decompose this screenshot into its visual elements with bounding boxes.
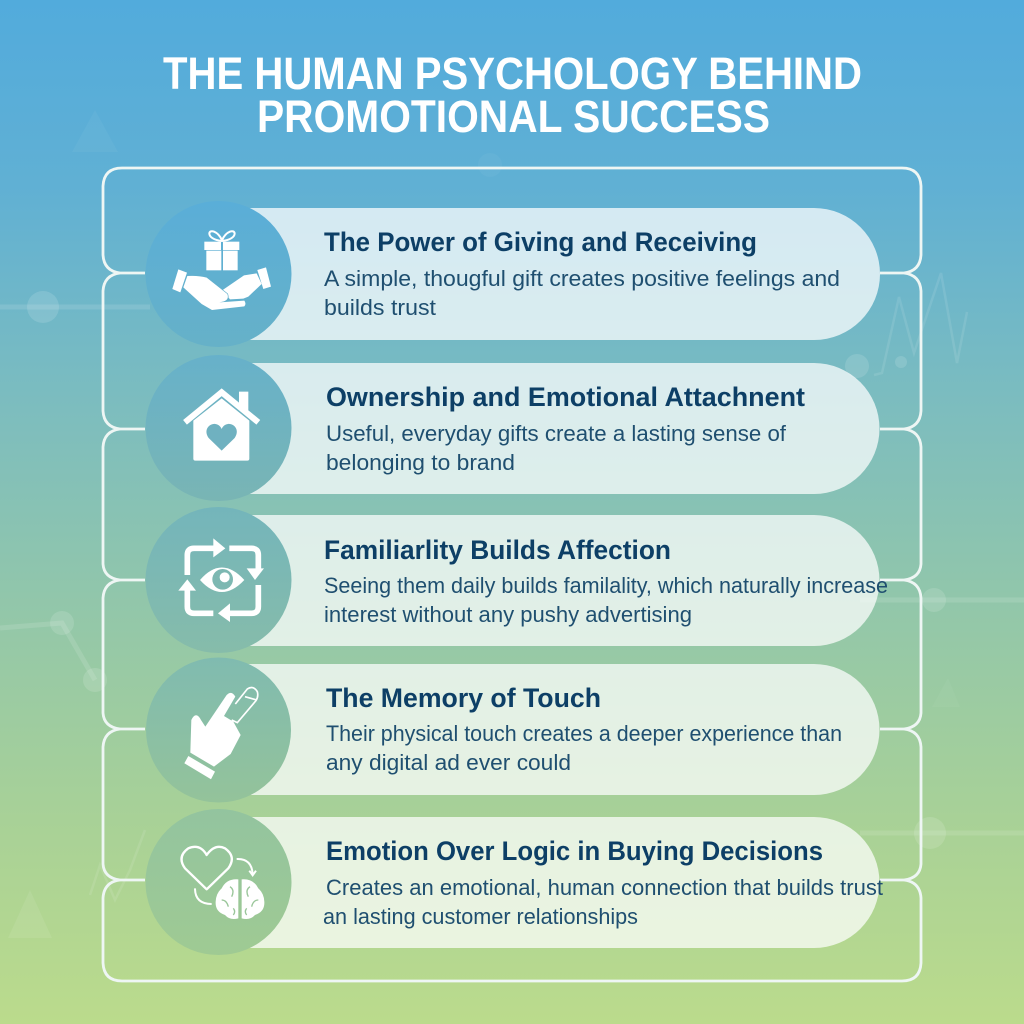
icon: hand touching pen (184, 687, 258, 779)
text block: interest without any pushy advertising (324, 602, 692, 627)
text block: belonging to brand (326, 450, 515, 475)
text block: A simple, thougful gift creates positive feelings and (324, 266, 840, 291)
text block: Emotion Over Logic in Buying Decisions (326, 836, 823, 866)
text block: Creates an emotional, human connection that builds trust (326, 875, 883, 900)
icon: eye with cycle arrows (178, 538, 264, 622)
title (163, 48, 862, 142)
text block: Useful, everyday gifts create a lasting sense of (326, 421, 787, 446)
text block (323, 836, 883, 929)
connected frame outline (103, 168, 921, 981)
text block (324, 227, 840, 320)
pill background (240, 515, 880, 646)
text block: Their physical touch creates a deeper experience than (326, 721, 842, 746)
icon circle (146, 355, 292, 501)
panel: ownership and emotional attachment (146, 355, 880, 501)
title: THE HUMAN PSYCHOLOGY BEHIND (163, 48, 862, 99)
icon circle (146, 201, 292, 347)
text block: Ownership and Emotional Attachnent (326, 382, 805, 412)
panel: emotion over logic (146, 809, 883, 955)
panel: the memory of touch (146, 658, 880, 802)
icon: gift in hands (172, 231, 271, 310)
icon: heart and brain (182, 847, 264, 919)
text block: any digital ad ever could (326, 750, 571, 775)
icon circle (146, 809, 292, 955)
pill background (240, 664, 880, 795)
pill background (240, 208, 880, 340)
icon circle (146, 507, 292, 653)
text block: an lasting customer relationships (323, 904, 638, 929)
panel: the power of giving and receiving (146, 201, 880, 347)
icon circle (146, 658, 291, 802)
text block: The Power of Giving and Receiving (324, 227, 757, 257)
title: PROMOTIONAL SUCCESS (257, 91, 770, 142)
text block: builds trust (324, 295, 436, 320)
pill background (240, 817, 880, 948)
text block (326, 382, 805, 475)
text block (324, 535, 888, 627)
text block (326, 683, 842, 775)
text block: Seeing them daily builds familality, which naturally increase (324, 573, 888, 598)
icon: house with heart (185, 392, 258, 461)
text block: The Memory of Touch (326, 683, 601, 713)
panel: familiarity builds affection (146, 507, 888, 653)
pill background (240, 363, 880, 494)
text block: Familiarlity Builds Affection (324, 535, 671, 565)
